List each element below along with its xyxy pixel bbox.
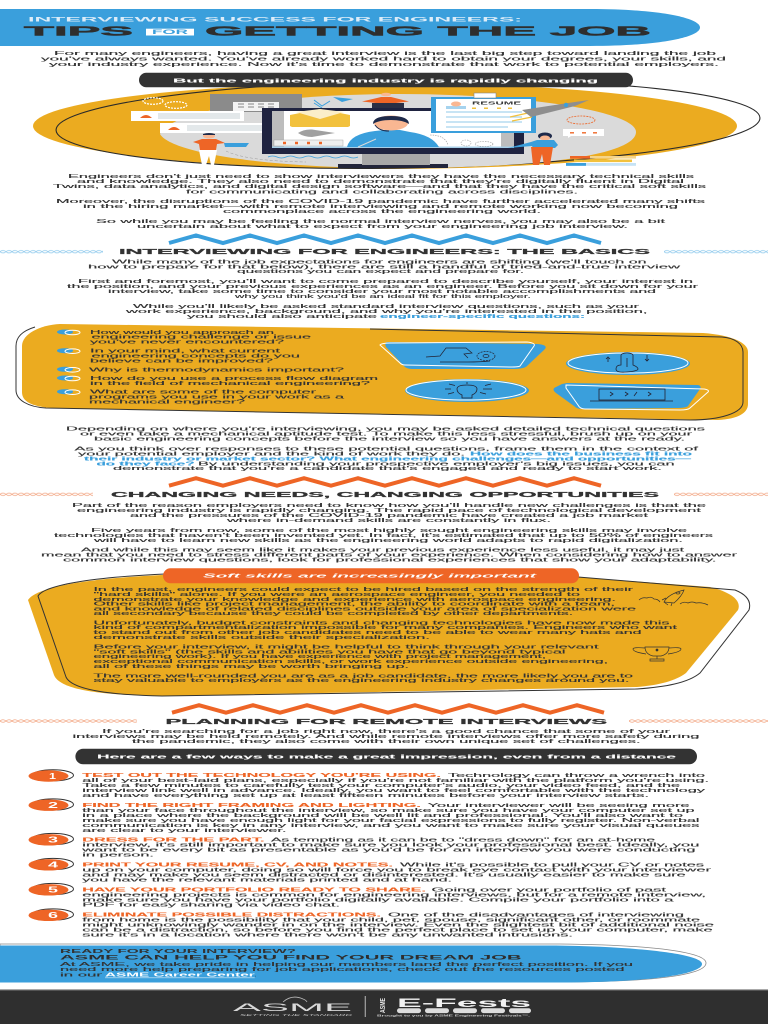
call to action banner [0, 944, 706, 982]
tip 1: test technology: Technology can throw a wrench into [448, 773, 706, 779]
footer [0, 989, 768, 1024]
text: covid disruption: commonplace across the engineering world. [223, 209, 541, 215]
text: relevant soft skills: exceptional communication skills, or work experience outside engineering, [94, 659, 608, 665]
logo: ASME: SETTING THE STANDARD [240, 1013, 352, 1017]
text: engineers digital skills: Engineers don't just need to show interviewers they have the necessary technical skills [68, 174, 696, 180]
figure: woman pointing [508, 132, 558, 165]
tip 2: framing and lighting [28, 799, 701, 834]
question list: in the field of mechanical engineering? [90, 381, 371, 387]
text: previous experience: common interview questions, look for professional experiences that show your adaptability. [63, 558, 716, 564]
question list: How do you use a process flow diagram [90, 376, 378, 382]
question bullets [57, 330, 80, 395]
title: FOR [152, 30, 190, 36]
text: interview nerves: So while you may be feeling the normal interview nerves, you may also be a bit [96, 219, 667, 225]
cta body: At ASME, we take pride in helping our members land the perfect position. If you [60, 962, 634, 968]
text: technical questions: or even take a mechanical aptitude test. To make this less stressful, brush up on your [80, 432, 693, 438]
cta body: . [255, 973, 256, 979]
logo: ASME: ASME [233, 1002, 352, 1014]
text: employer context: How does the business fit into [470, 452, 692, 458]
title [24, 24, 651, 38]
text: job expectations: questions you can expect and prepare for. [237, 269, 524, 275]
intro paragraph: For many engineers, having a great interview is the last big step toward landing the job [54, 51, 717, 57]
question list: engineering concepts do you [92, 354, 301, 360]
tip 5: portfolio [28, 883, 706, 909]
tip 5: portfolio: HAVE YOUR PORTFOLIO READY TO SHARE. [82, 888, 428, 894]
text: relevant soft skills: Before your interview, it might be helpful to think through your relevant [94, 645, 600, 651]
tip 2: framing and lighting: than your face throughout the interview, so make sure you have your computer set up [82, 808, 695, 814]
text: technical questions: basic engineering concepts before the interview so you have answers at the ready. [94, 437, 685, 443]
pill: great impression: Here are a few ways to make a great impression, even from a distance [97, 754, 676, 760]
text: covid disruption: Moreover, the disruptions of the COVID-19 pandemic have further accelerated many shifts [56, 199, 707, 205]
title kicker: INTERVIEWING SUCCESS FOR ENGINEERS: [28, 16, 522, 24]
text: hard skills: In the past, engineers could expect to be hired based on the strength of their [94, 587, 634, 593]
text: standard questions: you should also anticipate [187, 314, 378, 320]
heading: changing needs: CHANGING NEEDS, CHANGING OPPORTUNITIES [111, 492, 660, 499]
cta body: in our [60, 973, 103, 979]
text: compartmentalization: kind of compartmentalization impossible for many companies. Engineers who want [94, 625, 679, 631]
logo: E-Fests: ASME [380, 998, 387, 1013]
text: well-rounded: The more well-rounded you are as a job candidate, the more likely you are to [94, 674, 634, 680]
figure: left person with tablet [193, 133, 306, 165]
pill: great impression [75, 749, 697, 764]
cta heading: ASME CAN HELP YOU FIND YOUR DREAM JOB [60, 954, 523, 961]
icon: gear right [567, 116, 595, 124]
text: employer context [74, 447, 700, 472]
tip 2: framing and lighting: make sure you have enough light for your facial expressions to fully register. Non-verbal [82, 818, 699, 824]
icon: map pin [298, 129, 335, 137]
text: rapid change: Part of the reason employers need to know how you'll handle new challenges is that the [72, 503, 707, 509]
blue zigzag divider [169, 236, 601, 243]
text: employer context: do they face? [96, 462, 194, 468]
text: job expectations: While many of the job expectations for engineers are shifting (we'll touch on [112, 260, 647, 266]
text: interview nerves: uncertain about what to expect from your engineering job interview. [137, 224, 628, 230]
tip 4: print resume: up on your computer, doing so will force you to break eye contact with your interviewer [82, 868, 712, 874]
tip 6: distractions: One of the disadvantages of interviewing [388, 913, 685, 919]
text: five years from now: technologies that haven't been invented yet. In fact, it's estimated that up to 50% of engineers [54, 533, 715, 539]
text: technical questions [66, 427, 707, 443]
text: describe yourself: interview, take some time to consider your most notable accomplishments and [108, 289, 657, 295]
text: compartmentalization: Unfortunately, budget constraints and changing technologies have now made this [94, 621, 671, 627]
tip 6: distractions: can be a distraction, so before you find the perfect place to set up your computer, make [82, 928, 713, 934]
number badge 1: 1 [49, 772, 57, 781]
tip 4: print resume: you have the relevant materials printed and at hand. [82, 878, 452, 884]
tip 1: test technology: all of your best-laid plans, especially if you're not familiar with the platform you're using. [82, 778, 709, 784]
text: hard skills: and knowledge of related disciplines outside your area of specialization were [94, 607, 637, 613]
title: TIPS [24, 24, 135, 38]
figure: interviewer on screen [347, 116, 439, 147]
question list: you've never encountered? [90, 340, 285, 346]
text: standard questions: work experience, background, and why you're interested in the position, [126, 309, 648, 315]
text: employer context: their industry or market sector? What engineering challenges—and opportunities— [84, 457, 691, 463]
text: job expectations: how to prepare for that below), there are still a handful of tried-and-true interview [88, 265, 681, 271]
text: technical questions: Depending on where you're interviewing, you may be asked detailed technical questions [66, 427, 707, 433]
question list: In your mind, what current [90, 349, 282, 355]
text: five years from now [54, 528, 715, 544]
icon: gears left [143, 98, 187, 108]
orange zigzag divider [169, 478, 601, 486]
icon: device outlines [430, 135, 493, 146]
orange zigzag divider [172, 705, 604, 713]
icon: envelope [290, 109, 350, 127]
number badge 5: 5 [48, 886, 59, 895]
question list: How would you approach an [90, 330, 275, 336]
tip 4: print resume: and may make you seem distracted or disinterested. It's usually easier to make sure [82, 873, 686, 879]
icon: hand and gear [380, 342, 546, 369]
question list: mechanical engineer? [89, 400, 246, 406]
tip 1: test technology: Take a few minutes to carefully test your computer's audio, your video feed, and the [82, 783, 681, 789]
text: employer context: By understanding your prospective employer's big issues, you can [198, 462, 675, 468]
tip 6: distractions: ELIMINATE POSSIBLE DISTRACTIONS. [82, 913, 383, 919]
text: well-rounded [94, 674, 634, 684]
tip 1: test technology [28, 770, 709, 799]
intro paragraph: you've always wanted. You've already worked hard to obtain your degrees, your skills, and [41, 57, 727, 63]
text: five years from now: will have to learn new skills as the engineering world adapts to rapid digitalization. [94, 538, 683, 544]
text: engineers digital skills: Twins, data analytics, and digital design software—and that they have the critical soft skills [53, 184, 708, 190]
tip 2: framing and lighting: Your interviewer will be seeing more [428, 803, 690, 809]
pill: industry changing [139, 73, 633, 87]
text: compartmentalization: to stand out from other job candidates need to be able to wear many hats and [94, 630, 642, 636]
tip 3: dress for the part: interview, it's still important to make sure you look your professional best. Ideally, you [82, 843, 700, 849]
panel: engineering questions [16, 324, 748, 420]
text: five years from now: Five years from now, some of the most highly sought engineering skills may involve [91, 528, 688, 534]
text: relevant soft skills: engineering work). If you have experience with project management, [94, 654, 546, 660]
profile cards [131, 111, 273, 133]
text: engineers digital skills: and knowledge. They also need to demonstrate that they're digitally fluent in Digital [77, 179, 684, 185]
text: rapid change: where in-demand skills are constantly in flux. [227, 518, 551, 524]
tip 6: distractions: sure it's in a location where there won't be any unwanted intrusions. [82, 933, 573, 939]
cta body: need more help preparing for job applications, check out the resources posted [60, 967, 625, 973]
icon: light bulb [405, 379, 529, 402]
number badge 1 [28, 770, 74, 782]
number badge 2: 2 [48, 801, 59, 810]
panel: soft skills [28, 568, 750, 696]
tip 5: portfolio: PDF for easy sharing via video chat. [82, 903, 340, 909]
text: remote intro [72, 729, 700, 745]
text: rapid change [72, 503, 707, 524]
pill: soft skills heading: Soft skills are increasingly important [203, 573, 540, 579]
text: standard questions [126, 304, 648, 320]
icon: speech bubble [563, 129, 604, 138]
text: well-rounded: stay valuable to employers as the engineering industry changes around you. [94, 678, 629, 684]
text: relevant soft skills [94, 645, 608, 670]
text: compartmentalization [94, 621, 679, 641]
question list [89, 330, 378, 406]
number badge 4: 4 [48, 861, 59, 870]
figure: resume clipboard: RESUME [472, 100, 522, 105]
text: rapid change: engineering industry is rapidly changing. The rapid pace of technological development [77, 508, 703, 514]
text: describe yourself: First and foremost, you'll want to come prepared to describe yourself, your interest in [78, 279, 694, 285]
tip 4: print resume: PRINT YOUR RESUME, CV, AND NOTES. [82, 863, 395, 869]
icon: book stack [566, 156, 636, 166]
tip 4: print resume: While it's possible to pull your CV or notes [400, 863, 706, 869]
figure: person with laptop on top [362, 93, 409, 110]
number badge 6 [28, 909, 74, 921]
question list: programs you use in your work as a [89, 395, 345, 401]
heading: remote interviews [0, 718, 768, 726]
text: hard skills: demonstrate your knowledge and experience with aerospace engineering. [94, 597, 616, 603]
text: covid disruption [56, 199, 707, 215]
figure: resume clipboard [431, 93, 536, 133]
cta body: ASME Career Center [105, 973, 255, 979]
text: describe yourself: the position, and your previous experiences as an engineer. Before you sit down for your [67, 284, 699, 290]
tip 1: test technology: TEST OUT THE TECHNOLOGY YOU'RE USING. [82, 773, 443, 779]
text: engineers digital skills: for communicating and collaborating across disciplines. [186, 190, 578, 196]
tip 4: print resume [28, 858, 712, 884]
heading: remote interviews: PLANNING FOR REMOTE INTERVIEWS [166, 719, 608, 726]
tip 3: dress for the part: in person. [82, 853, 154, 859]
question list: Why is thermodynamics important? [89, 368, 345, 374]
logo: ASME [233, 997, 352, 1017]
tip 6: distractions: might unknowingly wander in on the interview. Even the slightest bit of additional noise [82, 923, 715, 929]
cta kicker: READY FOR YOUR INTERVIEW? [60, 949, 296, 955]
tip 5: portfolio: engineering projects is common for engineering interviews, but for a remote interview, [82, 893, 706, 899]
logo: E-Fests: E-Fests [397, 998, 531, 1010]
tip 3: dress for the part: DRESS FOR THE PART. [82, 838, 266, 844]
icon: pencil [522, 100, 589, 117]
icon: trophy [633, 647, 681, 661]
icon: laptop code [554, 383, 708, 410]
text: employer context: demonstrate that you're a candidate that's engaged and ready to start work. [113, 466, 662, 472]
tip 1: test technology: and have everything set up at least fifteen minutes before your interview starts. [82, 793, 649, 799]
tip 3: dress for the part [28, 833, 700, 859]
heading: the basics: INTERVIEWING FOR ENGINEERS: THE BASICS [119, 249, 651, 256]
text: relevant soft skills: "soft skills" (the skills and abilities you have that go beyond typical [94, 650, 566, 656]
monitor [262, 108, 524, 168]
question list: believe can be improved? [90, 359, 274, 365]
title: GETTING THE JOB [205, 24, 651, 38]
text: rapid change: and the pressures of the COVID-19 pandemic have created a job market [130, 513, 650, 519]
number badge 3 [28, 833, 74, 846]
text: covid disruption: in the hiring market—with remote interviewing and remote working now becoming [83, 204, 679, 210]
number badge 6: 6 [48, 911, 59, 920]
tip 3: dress for the part: want to be every bit as presentable as you'd be for an interview you were conducting [82, 848, 696, 854]
heading: changing needs [0, 491, 768, 499]
number badge 5 [28, 883, 74, 896]
heading: the basics [0, 249, 768, 256]
text: hard skills: Other skills like project management, the ability to coordinate with a team, [94, 602, 615, 608]
text: remote intro: If you're searching for a job right now, there's a good chance that some of your [102, 729, 671, 735]
logo: E-Fests: Brought to you by ASME Engineering Festivals™. [377, 1014, 530, 1018]
tip 2: framing and lighting: FIND THE RIGHT FRAMING AND LIGHTING. [82, 803, 423, 809]
text: hard skills: "hard skills" alone. If you were an aerospace engineer, you needed to [94, 592, 581, 598]
text: standard questions: engineer-specific questions: [380, 314, 586, 320]
number badge 2 [28, 799, 74, 811]
tip 1: test technology: interview link well in advance. Ideally, you want to feel comfortable with the technology [82, 788, 707, 794]
text: relevant soft skills: all of these things may be worth bringing up. [94, 664, 409, 670]
text: job expectations [88, 260, 681, 275]
text: remote intro: interviews may be held remotely. And while remote interviews offer more safety during [72, 734, 700, 740]
intro paragraph [41, 51, 727, 68]
text: hard skills: all secondary because they could be completed by other departments. [94, 611, 573, 617]
question list: What are some of the computer [90, 390, 317, 396]
tip 6: distractions: from home is the possibility that your child, pet, spouse, significant other, or roommate [82, 918, 701, 924]
icon: calendar [210, 94, 302, 112]
tip 5: portfolio: Going over your portfolio of past [432, 888, 668, 894]
tip 6: distractions [28, 909, 715, 939]
pill: industry changing: But the engineering industry is rapidly changing [173, 78, 600, 84]
tip 3: dress for the part: As tempting as it can be to "dress down" for an at-home [271, 838, 656, 844]
text: engineers digital skills [53, 174, 708, 196]
cta body [60, 962, 634, 979]
header banner [0, 9, 700, 46]
text: remote intro: the pandemic, they also come with their own unique set of challenges. [132, 739, 641, 745]
text: previous experience [41, 548, 738, 564]
rating bar [274, 140, 343, 146]
number badge 3: 3 [48, 836, 59, 845]
illustration: remote interview scene [33, 74, 761, 174]
tip 2: framing and lighting: are clear to your interviewer. [82, 828, 286, 834]
text: standard questions: While you'll likely be asked standard interview questions, such as your [133, 304, 640, 310]
text: previous experience: And while this may seem like it makes your previous experience less useful, it may just [81, 548, 686, 554]
icon: rocket [639, 590, 708, 606]
question list: engineering challenge or issue [92, 335, 312, 341]
text: interview nerves [96, 219, 667, 230]
logo: E-Fests [377, 998, 531, 1018]
intro paragraph: your industry experience. Now it's time to demonstrate that work to potential employers. [49, 62, 719, 68]
tip 5: portfolio: make sure you have your portfolio digitally available. Compile your portfolio into a [82, 898, 674, 904]
number badge 4 [28, 858, 74, 870]
pill: soft skills heading [163, 568, 579, 583]
text: employer context: your potential employer and the kind of work they do. [78, 452, 465, 458]
text: compartmentalization: demonstrate skills outside their specialization. [94, 635, 430, 641]
text: employer context: As you think over responses to these potential questions, frame them in the context of [74, 447, 700, 453]
text: describe yourself: why you think you'd be an ideal fit for this employer. [235, 294, 531, 300]
text: hard skills [94, 587, 637, 617]
icon: thermometer [566, 352, 690, 375]
text: previous experience: mean that you need to stress different parts of your experience. When considering how to answer [41, 553, 738, 559]
tip 2: framing and lighting: communication is key in any interview, and you want to make sure your visual queues [82, 823, 701, 829]
icon: lamp and paper plane [314, 97, 353, 108]
text: describe yourself [67, 279, 699, 300]
tip 2: framing and lighting: in a place where the background will be well lit and professional. You'll also want to [82, 813, 684, 819]
